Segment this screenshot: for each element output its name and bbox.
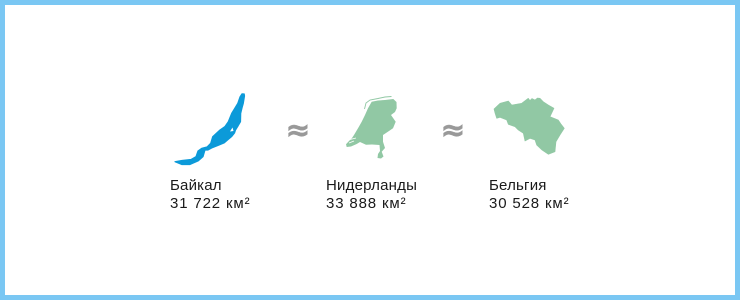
- label: Netherlands: Нидерланды: [326, 177, 417, 194]
- label: Belgium: 30 528 км²: [489, 195, 569, 212]
- label: Netherlands: [326, 177, 417, 212]
- label: Netherlands: 33 888 км²: [326, 195, 406, 212]
- label: Baikal: [170, 177, 250, 212]
- approximately sign 1: ≈: [285, 113, 311, 148]
- label: Belgium: [489, 177, 569, 212]
- label: Belgium: Бельгия: [489, 177, 547, 194]
- map: Netherlands: [346, 96, 397, 158]
- approximately sign 2: ≈: [440, 113, 466, 148]
- map: Lake Baikal: [175, 94, 244, 164]
- label: Baikal: Байкал: [170, 177, 222, 194]
- label: Baikal: 31 722 км²: [170, 195, 250, 212]
- map: Belgium: [494, 98, 564, 154]
